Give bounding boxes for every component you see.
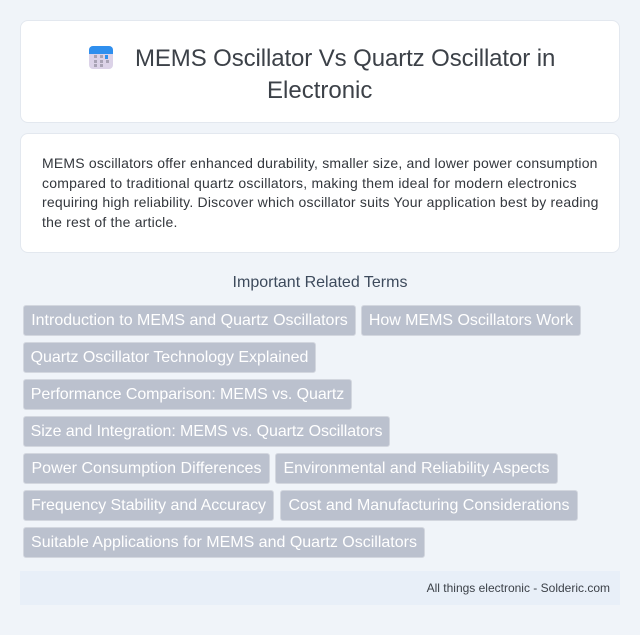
chip — [275, 453, 558, 484]
heading: related terms: Important Related Terms — [233, 274, 407, 291]
chip: Cost and Manufacturing Considerations — [288, 497, 570, 514]
icon: calendar — [89, 46, 113, 69]
chip — [23, 305, 356, 336]
chip — [23, 490, 274, 521]
chip — [23, 342, 316, 373]
chip: How MEMS Oscillators Work — [369, 312, 573, 329]
chip: Performance Comparison: MEMS vs. Quartz — [31, 386, 344, 403]
chip: Suitable Applications for MEMS and Quartz Oscillators — [31, 534, 417, 551]
title: Electronic — [267, 77, 372, 104]
chip: Frequency Stability and Accuracy — [31, 497, 266, 514]
chip: Size and Integration: MEMS vs. Quartz Oscillators — [31, 423, 382, 440]
title: MEMS Oscillator Vs Quartz Oscillator in — [135, 45, 555, 72]
chip — [23, 453, 270, 484]
chip — [361, 305, 581, 336]
footer credit: All things electronic - Solderic.com — [427, 581, 610, 595]
panel: title card — [20, 20, 620, 123]
chip: Power Consumption Differences — [31, 460, 262, 477]
chip: Introduction to MEMS and Quartz Oscillators — [31, 312, 348, 329]
intro paragraph: requiring high reliability. Discover which oscillator suits Your application best by reading — [42, 194, 599, 210]
intro paragraph — [42, 155, 599, 230]
chip — [23, 527, 425, 558]
footer — [20, 571, 620, 605]
chip: Environmental and Reliability Aspects — [283, 460, 550, 477]
chip — [23, 379, 352, 410]
chip — [23, 416, 390, 447]
chip — [280, 490, 578, 521]
title — [135, 45, 555, 104]
intro paragraph: compared to traditional quartz oscillators, making them ideal for modern electronics — [42, 175, 577, 191]
chip: Quartz Oscillator Technology Explained — [31, 349, 308, 366]
panel: intro text — [20, 133, 620, 253]
intro paragraph: MEMS oscillators offer enhanced durability, smaller size, and lower power consumption — [42, 155, 598, 171]
intro paragraph: the rest of the article. — [42, 214, 178, 230]
chip list: related terms — [23, 305, 581, 558]
